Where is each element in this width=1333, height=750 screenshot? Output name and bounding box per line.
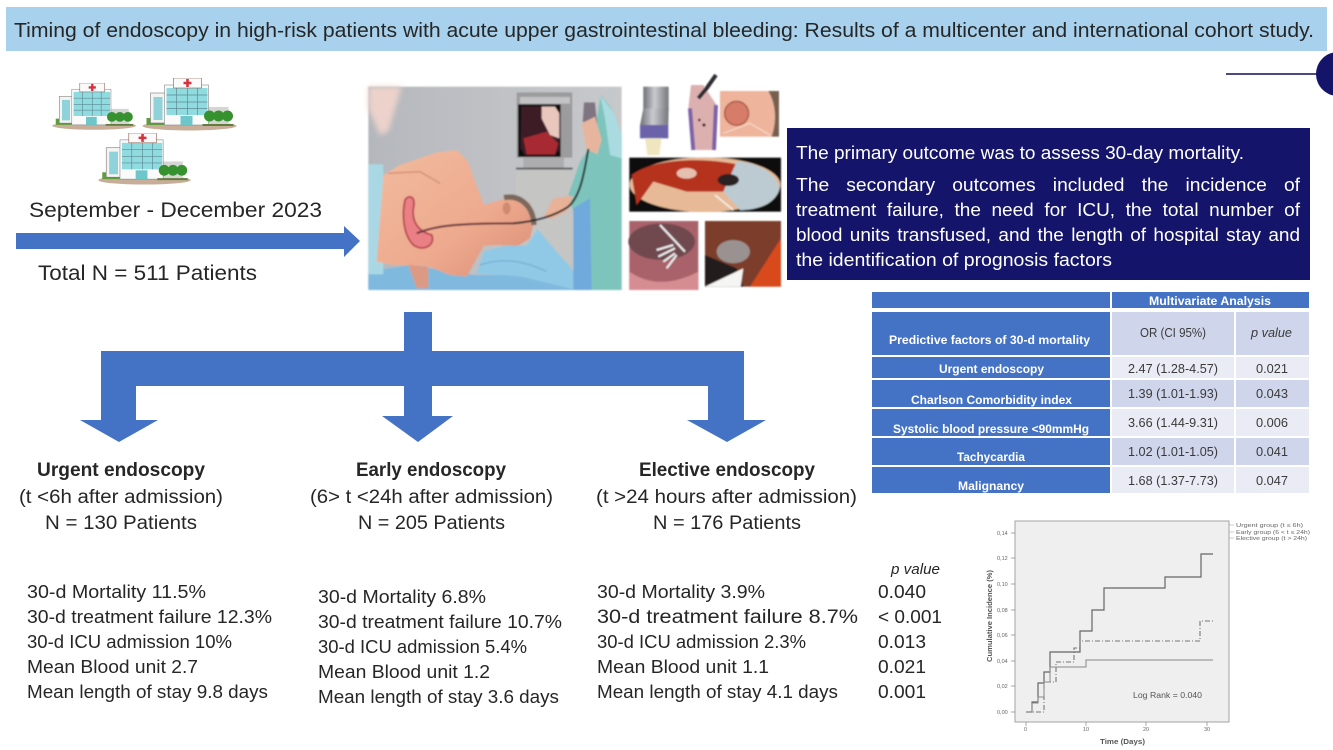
results: urgent group: Mean Blood unit 2.7 bbox=[27, 657, 198, 677]
results: early group: Mean Blood unit 1.2 bbox=[318, 662, 490, 682]
panel: study outcomes bbox=[787, 128, 1310, 280]
table header: Predictive factors of 30-d mortality bbox=[889, 333, 1090, 347]
table row: tachycardia: Tachycardia bbox=[957, 450, 1025, 464]
table row: Charlson comorbidity index: 0.043 bbox=[1256, 387, 1288, 401]
primary outcome text: The primary outcome was to assess 30-day mortality. bbox=[796, 143, 1244, 163]
photo: clipped bleeding site bbox=[705, 221, 781, 287]
chart legend bbox=[1229, 523, 1310, 542]
secondary outcomes text bbox=[796, 175, 1301, 270]
table header: Multivariate Analysis bbox=[1149, 294, 1271, 308]
table row: malignancy bbox=[958, 474, 1288, 493]
p values column: p value bbox=[890, 561, 940, 578]
curve: urgent group bbox=[1026, 554, 1213, 712]
group: urgent endoscopy header bbox=[19, 460, 223, 534]
table row: tachycardia: 0.041 bbox=[1256, 445, 1288, 459]
results: urgent group: 30-d Mortality 11.5% bbox=[27, 582, 206, 602]
p values column bbox=[878, 561, 942, 702]
total patients text: Total N = 511 Patients bbox=[38, 262, 257, 285]
y axis tick labels: 0,08 bbox=[997, 608, 1008, 614]
table row: malignancy: Malignancy bbox=[958, 479, 1024, 493]
results: early group: Mean length of stay 3.6 days bbox=[318, 687, 559, 707]
y axis title: Cumulative Incidence (%) bbox=[987, 570, 994, 662]
log rank annotation: Log Rank = 0.040 bbox=[1133, 691, 1203, 700]
x axis tick labels: 20 bbox=[1143, 727, 1149, 733]
x axis title: Time (Days) bbox=[1100, 739, 1145, 746]
results: urgent group bbox=[27, 582, 272, 702]
table row: systolic blood pressure: 0.006 bbox=[1256, 416, 1288, 430]
study period text: September - December 2023 bbox=[29, 199, 322, 222]
y axis tick labels: 0,14 bbox=[997, 531, 1008, 537]
x axis tick labels: 0 bbox=[1024, 727, 1027, 733]
p values column: < 0.001 bbox=[878, 607, 942, 627]
table row: urgent endoscopy: 0.021 bbox=[1256, 362, 1288, 376]
table row: urgent endoscopy: Urgent endoscopy bbox=[939, 362, 1044, 376]
y axis tick labels: 0,12 bbox=[997, 556, 1008, 562]
group: early endoscopy header bbox=[310, 460, 553, 534]
table header bbox=[889, 294, 1292, 347]
secondary outcomes text: blood units transfused, and the length of hospital stay and bbox=[796, 225, 1300, 245]
group: elective endoscopy header: Elective endoscopy bbox=[639, 460, 815, 481]
photo: ulcer endoscopic view bbox=[720, 91, 779, 137]
group: early endoscopy header: Early endoscopy bbox=[356, 460, 506, 481]
p values column: 0.021 bbox=[878, 657, 926, 677]
y axis tick labels: 0,10 bbox=[997, 582, 1008, 588]
group: elective endoscopy header: (t >24 hours after admission) bbox=[596, 487, 857, 508]
y axis tick labels: 0,06 bbox=[997, 633, 1008, 639]
illustration: endoscopy procedure bbox=[368, 87, 622, 290]
secondary outcomes text: treatment failure, the need for ICU, the total number of bbox=[796, 200, 1301, 220]
results: early group bbox=[318, 587, 562, 707]
secondary outcomes text: the identification of prognosis factors bbox=[796, 250, 1112, 270]
group: urgent endoscopy header: Urgent endoscopy bbox=[37, 460, 205, 481]
illustration: endoscope tip bbox=[640, 87, 669, 155]
photo: hemostatic clips in lumen bbox=[628, 221, 698, 290]
table header: p value bbox=[1250, 326, 1292, 340]
group: early endoscopy header: N = 205 Patients bbox=[358, 513, 505, 534]
title banner bbox=[6, 7, 1327, 51]
results: elective group bbox=[597, 582, 858, 702]
illustration: esophagus cross-section bbox=[688, 75, 717, 150]
results: elective group: Mean length of stay 4.1 days bbox=[597, 682, 838, 702]
results: urgent group: 30-d treatment failure 12.3% bbox=[27, 607, 272, 627]
p values column: 0.001 bbox=[878, 682, 926, 702]
arrow: study timeline to endoscopy bbox=[16, 226, 360, 257]
table row: urgent endoscopy: 2.47 (1.28-4.57) bbox=[1128, 362, 1218, 376]
p values column: 0.040 bbox=[878, 582, 926, 602]
title banner: Timing of endoscopy in high-risk patients with acute upper gastrointestinal bleeding: Results of a multicenter and international cohort study. bbox=[14, 20, 1314, 42]
table row: tachycardia: 1.02 (1.01-1.05) bbox=[1128, 445, 1218, 459]
table: multivariate analysis bbox=[872, 292, 1309, 493]
table row: tachycardia bbox=[957, 445, 1288, 464]
table row: Charlson comorbidity index: 1.39 (1.01-1.93) bbox=[1128, 387, 1218, 401]
chart legend: Early group (6 < t ≤ 24h) bbox=[1236, 530, 1310, 536]
chart legend: Elective group (t > 24h) bbox=[1236, 536, 1307, 542]
group: early endoscopy header: (6> t <24h after admission) bbox=[310, 487, 553, 508]
decorative navy line and circle marker bbox=[1226, 52, 1333, 96]
table row: systolic blood pressure: 3.66 (1.44-9.31) bbox=[1128, 416, 1218, 430]
curve: early group bbox=[1026, 621, 1213, 712]
y axis tick labels: 0,04 bbox=[997, 659, 1008, 665]
group: elective endoscopy header bbox=[596, 460, 857, 534]
group: urgent endoscopy header: N = 130 Patients bbox=[45, 513, 197, 534]
group: elective endoscopy header: N = 176 Patients bbox=[653, 513, 801, 534]
results: early group: 30-d ICU admission 5.4% bbox=[318, 637, 527, 657]
y axis tick labels: 0,00 bbox=[997, 710, 1008, 716]
p values column: 0.013 bbox=[878, 632, 926, 652]
table row: systolic blood pressure: Systolic blood pressure <90mmHg bbox=[893, 422, 1089, 436]
table row: malignancy: 0.047 bbox=[1256, 474, 1288, 488]
table row: malignancy: 1.68 (1.37-7.73) bbox=[1128, 474, 1218, 488]
photo: bleeding lesion bbox=[629, 157, 781, 212]
secondary outcomes text: The secondary outcomes included the incidence of bbox=[796, 175, 1301, 195]
results: elective group: 30-d treatment failure 8.7% bbox=[597, 607, 858, 628]
chart: cumulative incidence of mortality bbox=[987, 521, 1310, 746]
flow arrows: three branches bbox=[80, 312, 766, 442]
y axis tick labels bbox=[997, 531, 1008, 716]
table row: Charlson comorbidity index bbox=[911, 387, 1288, 407]
results: urgent group: Mean length of stay 9.8 days bbox=[27, 682, 268, 702]
table row: Charlson comorbidity index: Charlson Comorbidity index bbox=[911, 393, 1072, 407]
y axis tick labels: 0,02 bbox=[997, 684, 1008, 690]
table row: urgent endoscopy bbox=[939, 362, 1288, 376]
table header: OR (CI 95%) bbox=[1140, 326, 1206, 340]
results: early group: 30-d treatment failure 10.7% bbox=[318, 612, 562, 632]
x axis tick labels: 10 bbox=[1083, 727, 1089, 733]
results: elective group: Mean Blood unit 1.1 bbox=[597, 657, 769, 677]
results: elective group: 30-d Mortality 3.9% bbox=[597, 582, 765, 602]
table row: systolic blood pressure bbox=[893, 416, 1288, 436]
group: urgent endoscopy header: (t <6h after admission) bbox=[19, 487, 223, 508]
x axis tick labels: 30 bbox=[1204, 727, 1210, 733]
x axis tick labels bbox=[1024, 727, 1210, 733]
chart legend: Urgent group (t ≤ 6h) bbox=[1236, 523, 1303, 529]
results: elective group: 30-d ICU admission 2.3% bbox=[597, 632, 806, 652]
icon: three hospitals bbox=[52, 78, 236, 185]
results: early group: 30-d Mortality 6.8% bbox=[318, 587, 486, 607]
curve: elective group bbox=[1026, 660, 1213, 712]
results: urgent group: 30-d ICU admission 10% bbox=[27, 632, 232, 652]
